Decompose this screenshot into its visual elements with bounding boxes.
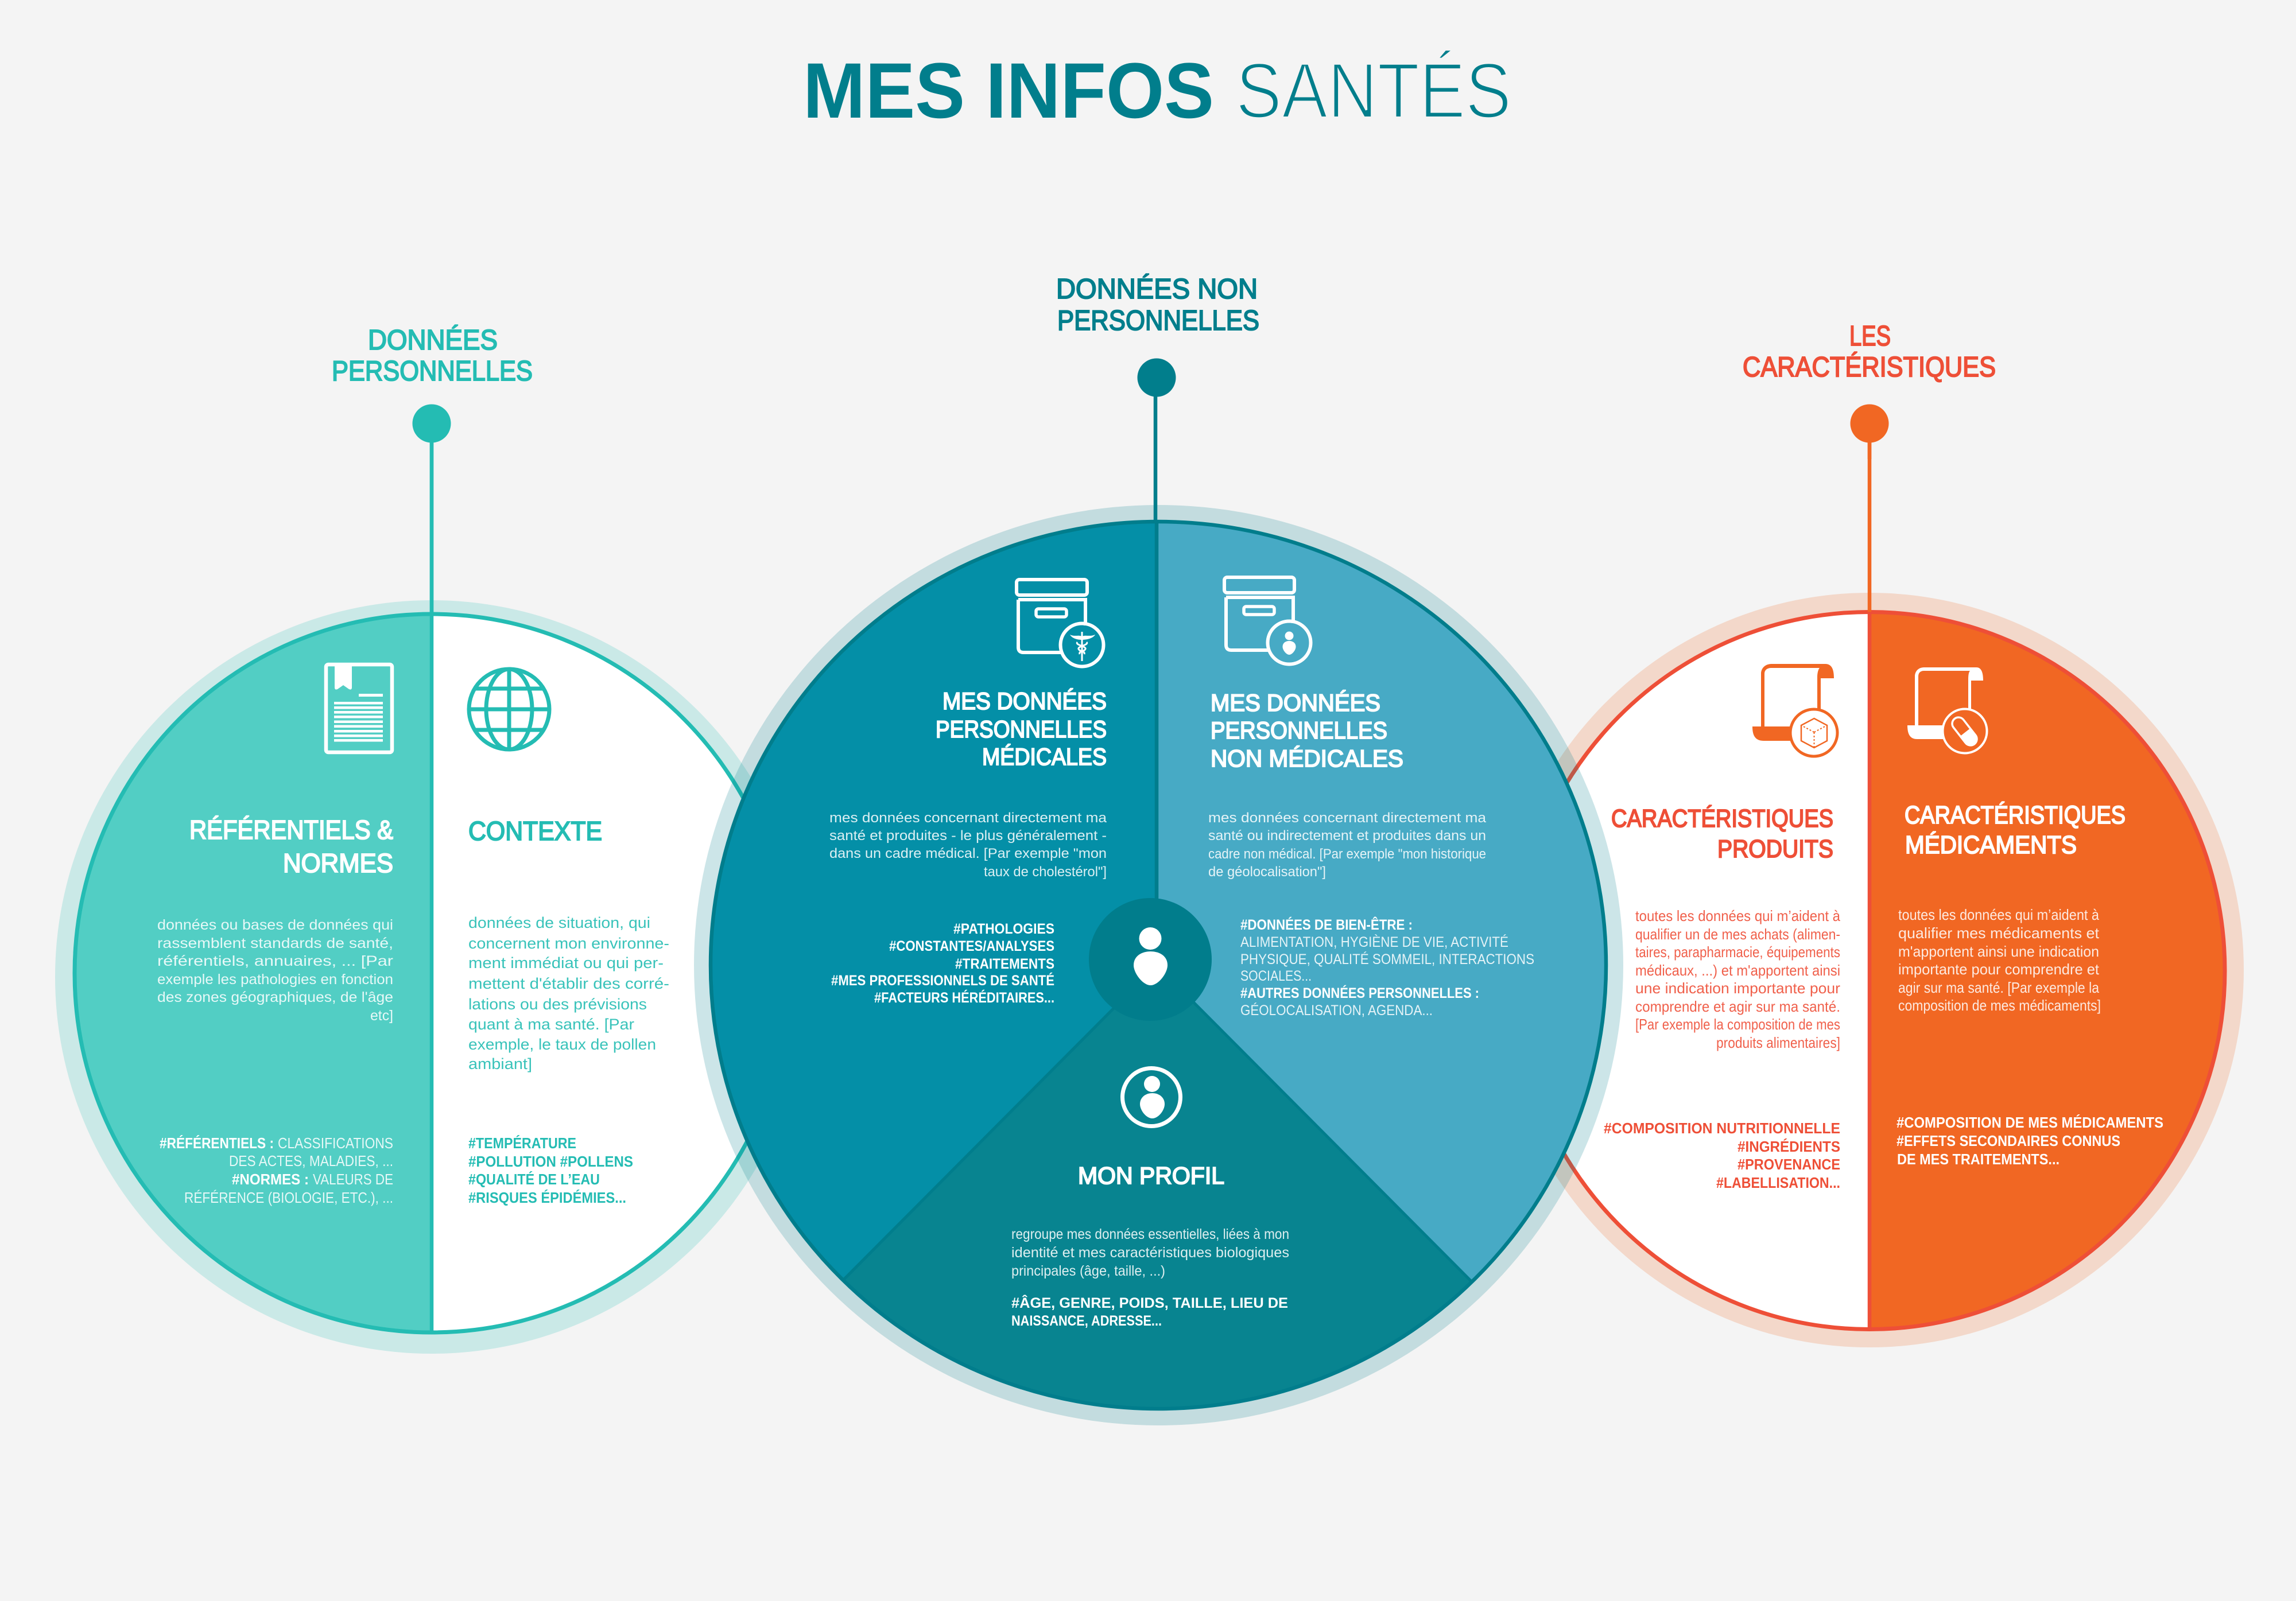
- text: référentiels description: référentiels, annuaires, ... [Par: [157, 953, 393, 969]
- label: données non personnelles: DONNÉES NON: [1056, 274, 1258, 305]
- icon: book: [326, 665, 392, 752]
- text: référentiels description: rassemblent standards de santé,: [157, 935, 393, 951]
- heading: caractéristiques médicaments: [1905, 801, 2126, 859]
- text: caractéristiques produits description: médicaux, ...) et m'apportent ainsi: [1635, 962, 1840, 979]
- heading: contexte: CONTEXTE: [468, 816, 602, 846]
- text: contexte description: ambiant]: [468, 1055, 532, 1072]
- tags: données non médicales: [1240, 916, 1534, 1019]
- text: contexte description: mettent d'établir des corré-: [468, 975, 669, 992]
- text: caractéristiques médicaments description: [1898, 906, 2101, 1014]
- tags: caractéristiques produits: #PROVENANCE: [1737, 1156, 1840, 1173]
- icon: scroll with pill: [1907, 667, 1987, 753]
- tags: référentiels: #RÉFÉRENTIELS :: [160, 1134, 274, 1152]
- tags: données non médicales: ALIMENTATION, HYGIÈNE DE VIE, ACTIVITÉ: [1240, 934, 1508, 950]
- label: données personnelles: DONNÉES: [368, 325, 498, 356]
- text: caractéristiques produits description: [Par exemple la composition de mes: [1635, 1016, 1840, 1033]
- tags: caractéristiques médicaments: DE MES TRAITEMENTS...: [1897, 1151, 2060, 1168]
- tags: données médicales: #FACTEURS HÉRÉDITAIRES...: [874, 989, 1054, 1006]
- text: contexte description: concernent mon environne-: [468, 935, 669, 952]
- text: données non médicales description: [1208, 810, 1487, 880]
- panel: mes données personnelles médicales: [829, 580, 1107, 1006]
- text: mon profil description: identité et mes caractéristiques biologiques: [1011, 1245, 1289, 1261]
- tags: référentiels: RÉFÉRENCE (BIOLOGIE, ETC.), ...: [184, 1189, 393, 1206]
- text: données médicales description: taux de cholestérol"]: [984, 864, 1107, 880]
- tags: mon profil: NAISSANCE, ADRESSE...: [1011, 1313, 1162, 1329]
- label: les caractéristiques: LES: [1849, 321, 1891, 352]
- pin: données non personnelles: [1138, 358, 1176, 522]
- pin: données personnelles: [412, 404, 451, 614]
- text: caractéristiques médicaments description: agir sur ma santé. [Par exemple la: [1898, 979, 2099, 996]
- text: caractéristiques produits description: comprendre et agir sur ma santé.: [1635, 998, 1840, 1015]
- panel: center circle base: [687, 516, 1626, 1437]
- icon: box with person: [1224, 577, 1311, 665]
- tags: mon profil: #ÂGE, GENRE, POIDS, TAILLE, LIEU DE: [1011, 1294, 1288, 1311]
- text: caractéristiques produits description: taires, parapharmacie, équipements: [1635, 943, 1840, 961]
- text: contexte description: quant à ma santé. [Par: [468, 1016, 634, 1033]
- text: données non médicales description: cadre non médical. [Par exemple "mon historique: [1208, 846, 1486, 862]
- label: les caractéristiques: CARACTÉRISTIQUES: [1743, 352, 1996, 383]
- tags: caractéristiques produits: #INGRÉDIENTS: [1737, 1138, 1840, 1155]
- text: mon profil description: principales (âge, taille, ...): [1011, 1263, 1165, 1279]
- tags: données médicales: [831, 921, 1054, 1006]
- tags: données médicales: #MES PROFESSIONNELS DE SANTÉ: [831, 972, 1054, 989]
- label: données non personnelles: PERSONNELLES: [1057, 305, 1259, 336]
- hub with person icon: [1089, 898, 1212, 1021]
- heading: référentiels et normes: [189, 815, 393, 878]
- heading: données non médicales: PERSONNELLES: [1211, 717, 1387, 744]
- panel: right circle base: [1514, 442, 2231, 1337]
- heading: données non médicales: MES DONNÉES: [1211, 689, 1380, 716]
- heading: données médicales: PERSONNELLES: [936, 716, 1107, 743]
- heading: données médicales: MES DONNÉES: [943, 687, 1107, 714]
- tags: contexte: #RISQUES ÉPIDÉMIES...: [468, 1189, 626, 1206]
- text: données non médicales description: de géolocalisation"]: [1208, 864, 1326, 880]
- tags: données médicales: #PATHOLOGIES: [953, 921, 1054, 937]
- label: données personnelles: [332, 325, 533, 387]
- icon: globe: [469, 669, 549, 749]
- text: référentiels description: des zones géographiques, de l'âge: [157, 989, 393, 1005]
- heading: données non médicales: NON MÉDICALES: [1211, 745, 1403, 772]
- text: mon profil description: [1011, 1226, 1289, 1279]
- text: caractéristiques médicaments description: importante pour comprendre et: [1898, 961, 2100, 978]
- text: contexte description: [468, 914, 669, 1072]
- title: SANTÉS: [1236, 47, 1511, 135]
- text: contexte description: ment immédiat ou qui per-: [468, 954, 664, 972]
- label: données non personnelles: [1056, 274, 1259, 336]
- text: référentiels description: [157, 917, 393, 1024]
- tags: référentiels: #NORMES :: [232, 1171, 309, 1188]
- text: caractéristiques produits description: toutes les données qui m’aident à: [1635, 907, 1840, 924]
- pin: les caractéristiques: [1851, 404, 1888, 459]
- tags: référentiels: CLASSIFICATIONS: [278, 1134, 393, 1152]
- panel: mes données personnelles non médicales: [1208, 577, 1534, 1019]
- text: données médicales description: mes données concernant directement ma: [829, 810, 1107, 826]
- tags: données non médicales: SOCIALES...: [1240, 968, 1312, 984]
- icon: profile: [1123, 1068, 1180, 1126]
- tags: mon profil: [1011, 1294, 1288, 1329]
- text: caractéristiques produits description: qualifier un de mes achats (alimen-: [1635, 926, 1840, 943]
- text: données médicales description: [829, 810, 1107, 880]
- tags: contexte: #TEMPÉRATURE: [468, 1134, 576, 1152]
- left circle halo: [55, 600, 808, 1354]
- text: caractéristiques produits description: [1635, 907, 1840, 1051]
- text: contexte description: exemple, le taux de pollen: [468, 1036, 656, 1053]
- tags: caractéristiques produits: [1604, 1120, 1840, 1191]
- text: données médicales description: santé et produites - le plus généralement -: [829, 828, 1107, 844]
- icon: scroll with cube: [1752, 664, 1837, 756]
- right circle halo: [1495, 593, 2244, 1347]
- title: [803, 47, 1511, 135]
- heading: caractéristiques produits: [1611, 805, 1833, 863]
- heading: caractéristiques médicaments: CARACTÉRISTIQUES: [1905, 801, 2126, 829]
- tags: caractéristiques médicaments: #EFFETS SECONDAIRES CONNUS: [1896, 1132, 2120, 1149]
- panel: caractéristiques médicaments: [1896, 667, 2163, 1168]
- heading: données médicales: MÉDICALES: [982, 743, 1107, 770]
- tags: données médicales: #CONSTANTES/ANALYSES: [889, 938, 1054, 954]
- tags: caractéristiques produits: #LABELLISATION...: [1716, 1174, 1840, 1191]
- text: contexte description: données de situation, qui: [468, 914, 650, 931]
- tags: référentiels: VALEURS DE: [313, 1171, 393, 1188]
- title: MES INFOS: [803, 47, 1214, 135]
- tags: données non médicales: #AUTRES DONNÉES PERSONNELLES :: [1240, 985, 1479, 1001]
- text: mon profil description: regroupe mes données essentielles, liées à mon: [1011, 1226, 1289, 1242]
- text: caractéristiques produits description: une indication importante pour: [1635, 980, 1840, 997]
- tags: données non médicales: PHYSIQUE, QUALITÉ SOMMEIL, INTERACTIONS: [1240, 951, 1534, 967]
- heading: caractéristiques produits: CARACTÉRISTIQUES: [1611, 805, 1833, 833]
- tags: référentiels: DES ACTES, MALADIES, ...: [229, 1152, 393, 1169]
- tags: référentiels: [160, 1134, 393, 1206]
- text: caractéristiques médicaments description: qualifier mes médicaments et: [1898, 924, 2100, 942]
- heading: caractéristiques produits: PRODUITS: [1717, 835, 1833, 863]
- heading: mon profil: MON PROFIL: [1078, 1162, 1224, 1189]
- tags: données non médicales: #DONNÉES DE BIEN-ÊTRE :: [1240, 916, 1413, 933]
- heading: référentiels et normes: RÉFÉRENTIELS &: [189, 815, 393, 845]
- text: caractéristiques médicaments description: toutes les données qui m’aident à: [1898, 906, 2099, 923]
- tags: contexte: #QUALITÉ DE L’EAU: [468, 1171, 600, 1188]
- tags: contexte: [468, 1134, 633, 1206]
- icon: box with caduceus: [1017, 580, 1103, 667]
- tags: caractéristiques produits: #COMPOSITION NUTRITIONNELLE: [1604, 1120, 1840, 1137]
- panel: left circle base: [69, 442, 789, 1337]
- text: caractéristiques médicaments description: m'apportent ainsi une indication: [1898, 943, 2099, 960]
- text: données non médicales description: mes données concernant directement ma: [1208, 810, 1487, 826]
- panel: caractéristiques produits: [1604, 664, 1840, 1191]
- heading: données non médicales: [1211, 689, 1403, 772]
- tags: caractéristiques médicaments: [1896, 1114, 2163, 1168]
- heading: données médicales: [936, 687, 1107, 770]
- heading: référentiels et normes: NORMES: [283, 848, 393, 878]
- text: caractéristiques produits description: produits alimentaires]: [1716, 1034, 1840, 1051]
- text: données non médicales description: santé ou indirectement et produites dans un: [1208, 828, 1486, 844]
- heading: caractéristiques médicaments: MÉDICAMENTS: [1905, 831, 2077, 859]
- tags: données médicales: #TRAITEMENTS: [955, 956, 1054, 972]
- tags: caractéristiques médicaments: #COMPOSITION DE MES MÉDICAMENTS: [1896, 1114, 2163, 1131]
- text: caractéristiques médicaments description: composition de mes médicaments]: [1898, 997, 2101, 1014]
- text: données médicales description: dans un cadre médical. [Par exemple "mon: [829, 846, 1107, 861]
- panel: mon profil: [1011, 1068, 1289, 1329]
- panel: référentiels et normes: [157, 665, 393, 1206]
- tags: données non médicales: GÉOLOCALISATION, AGENDA...: [1240, 1002, 1433, 1019]
- text: référentiels description: données ou bases de données qui: [157, 917, 393, 933]
- center circle halo: [694, 505, 1623, 1425]
- panel: contexte: [468, 669, 669, 1206]
- text: référentiels description: exemple les pathologies en fonction: [157, 972, 393, 988]
- text: référentiels description: etc]: [370, 1008, 393, 1024]
- text: contexte description: lations ou des prévisions: [468, 996, 647, 1013]
- label: données personnelles: PERSONNELLES: [332, 356, 533, 387]
- tags: contexte: #POLLUTION #POLLENS: [468, 1153, 633, 1170]
- label: les caractéristiques: [1743, 321, 1996, 383]
